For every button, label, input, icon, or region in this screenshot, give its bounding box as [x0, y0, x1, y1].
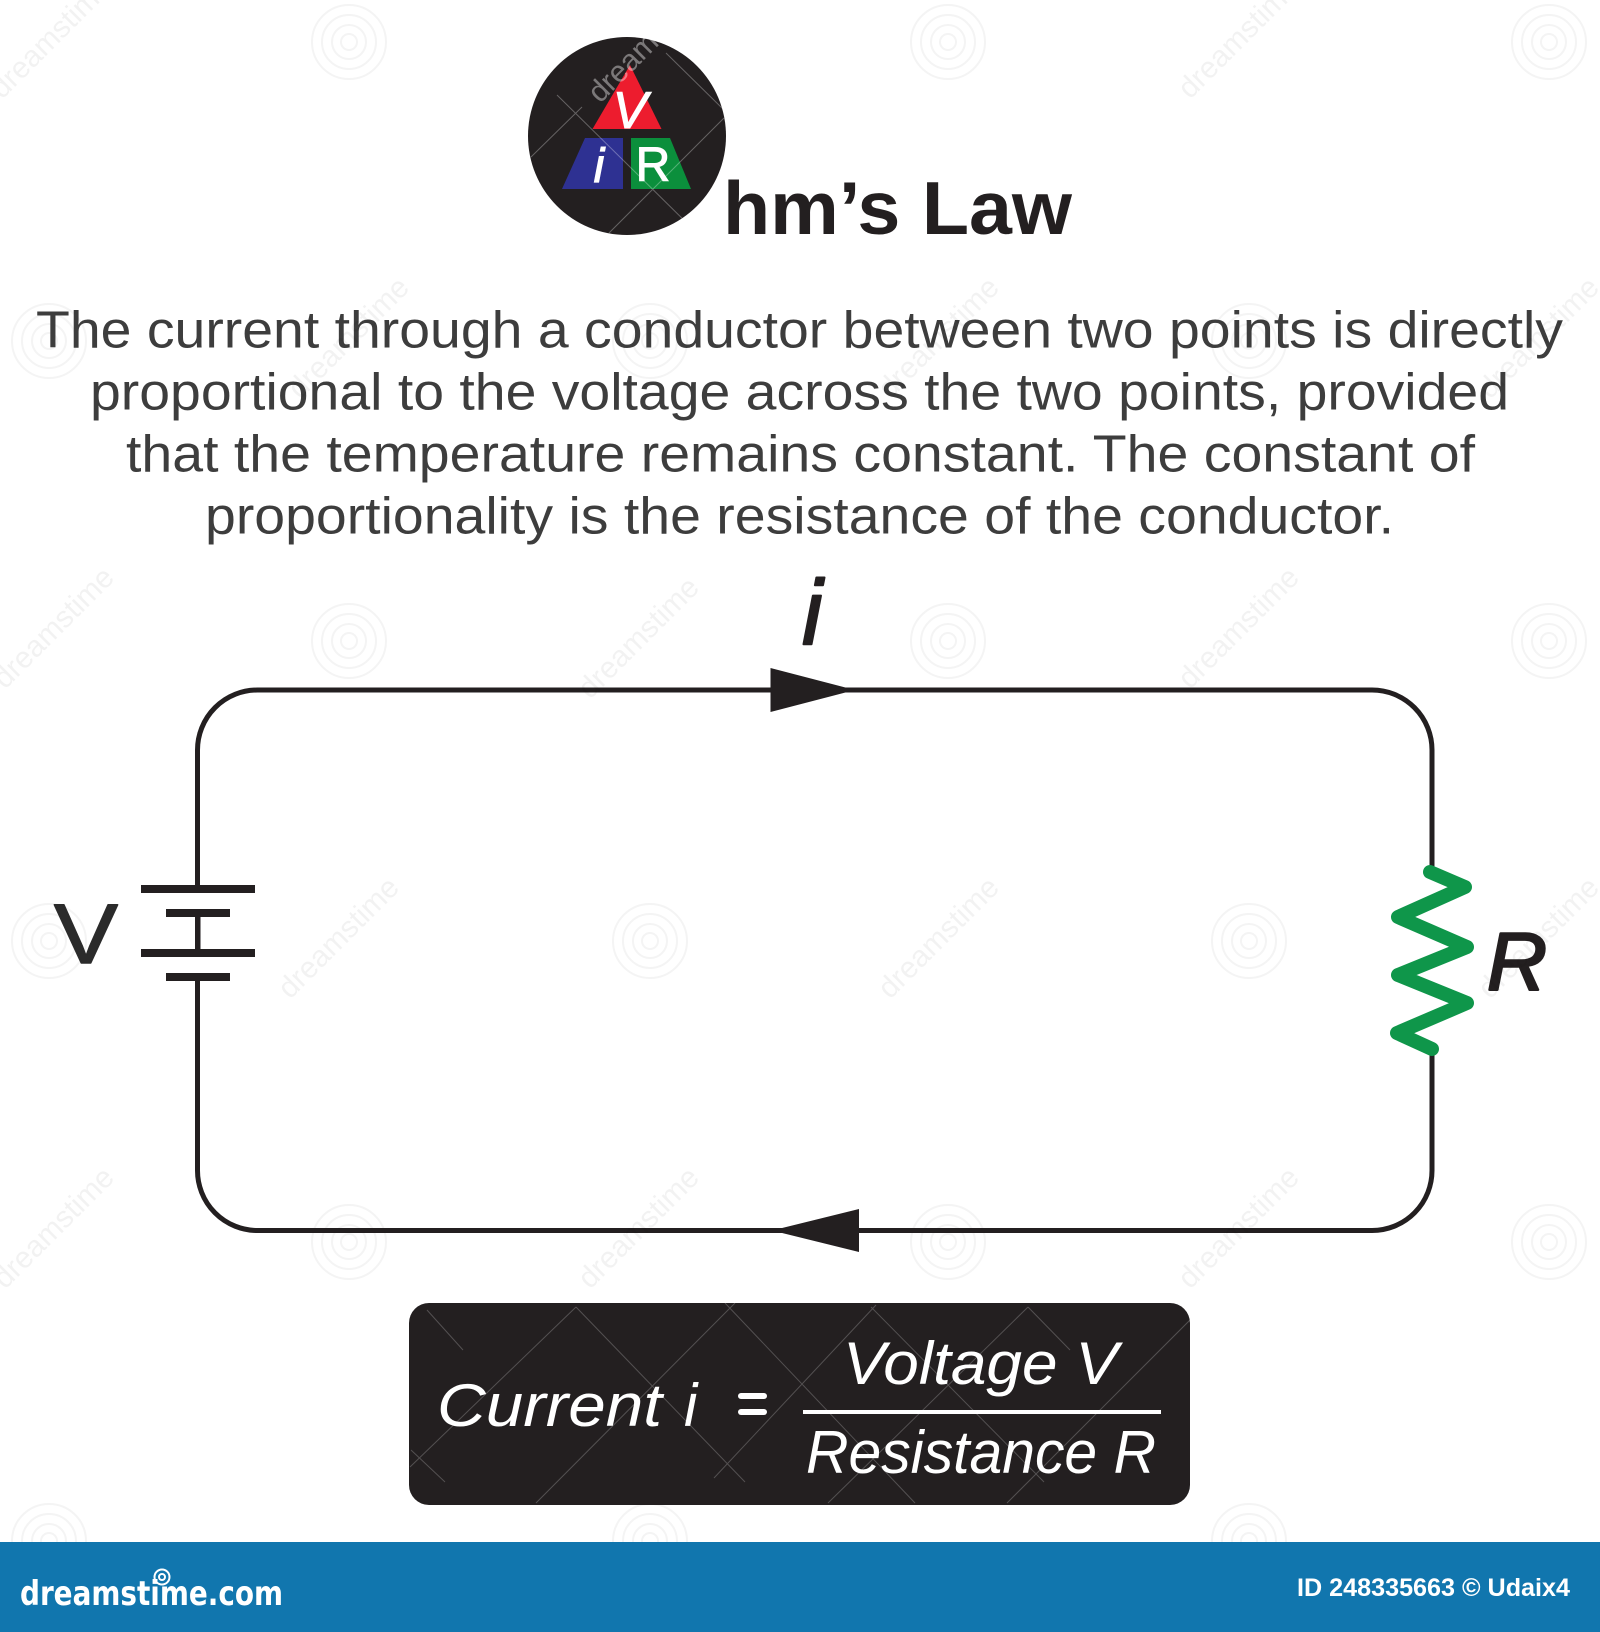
footer logo text: dreamstime.com — [20, 1574, 283, 1614]
definition paragraph: The current through a conductor between two points is directly — [36, 302, 1563, 360]
label: resistance R: R — [1487, 917, 1547, 1008]
watermark text: dreamstime — [572, 1161, 706, 1295]
definition paragraph: proportional to the voltage across the two points, provided — [90, 364, 1509, 422]
definition paragraph — [36, 302, 1563, 546]
watermark text: dream — [582, 25, 665, 109]
watermark text — [0, 0, 1600, 1295]
watermark text: dreamstime — [872, 271, 1006, 405]
formula: numerator: Voltage V — [843, 1330, 1123, 1397]
circuit wire — [197, 690, 1432, 1231]
watermark text: dreamstime — [572, 571, 706, 705]
title text: hm’s Law — [723, 166, 1073, 250]
watermark text: dreamstime — [1172, 1161, 1306, 1295]
battery symbol — [141, 885, 255, 981]
logo red triangle with V — [592, 65, 662, 140]
formula: denominator: Resistance R — [806, 1419, 1156, 1486]
watermark lines on logo — [531, 53, 724, 233]
watermark text: dreamstime — [1172, 561, 1306, 695]
formula: equals sign — [738, 1393, 767, 1415]
label: current i: i — [802, 562, 825, 664]
watermark text: dreamstime — [872, 871, 1006, 1005]
title logo: V i R triangle in black circle — [528, 37, 726, 235]
resistor symbol — [1397, 872, 1467, 1049]
watermark text: dreamstime — [272, 871, 406, 1005]
definition paragraph: that the temperature remains constant. The constant of — [126, 426, 1476, 484]
label: voltage V: V — [54, 887, 118, 981]
circuit diagram — [54, 562, 1547, 1252]
watermark text: dreamstime — [282, 271, 416, 405]
watermark lines on card — [410, 1303, 1190, 1503]
formula: fraction bar — [803, 1410, 1161, 1414]
arrow: current bottom — [772, 1209, 859, 1252]
logo blue trapezoid with i: i — [594, 140, 606, 193]
formula: left side: Current — [437, 1372, 665, 1439]
logo blue trapezoid with i — [562, 138, 623, 193]
footer bar — [0, 1542, 1600, 1632]
logo green trapezoid with R: R — [636, 139, 670, 192]
footer logo swirl — [154, 1570, 170, 1584]
footer image id and credit: ID 248335663 © Udaix4 — [1297, 1574, 1570, 1602]
arrow: current top — [770, 668, 855, 712]
logo green trapezoid with R — [631, 138, 691, 192]
logo red triangle with V: V — [613, 82, 652, 140]
formula card — [409, 1303, 1190, 1505]
formula: i: i — [684, 1372, 699, 1439]
definition paragraph: proportionality is the resistance of the conductor. — [205, 488, 1394, 546]
